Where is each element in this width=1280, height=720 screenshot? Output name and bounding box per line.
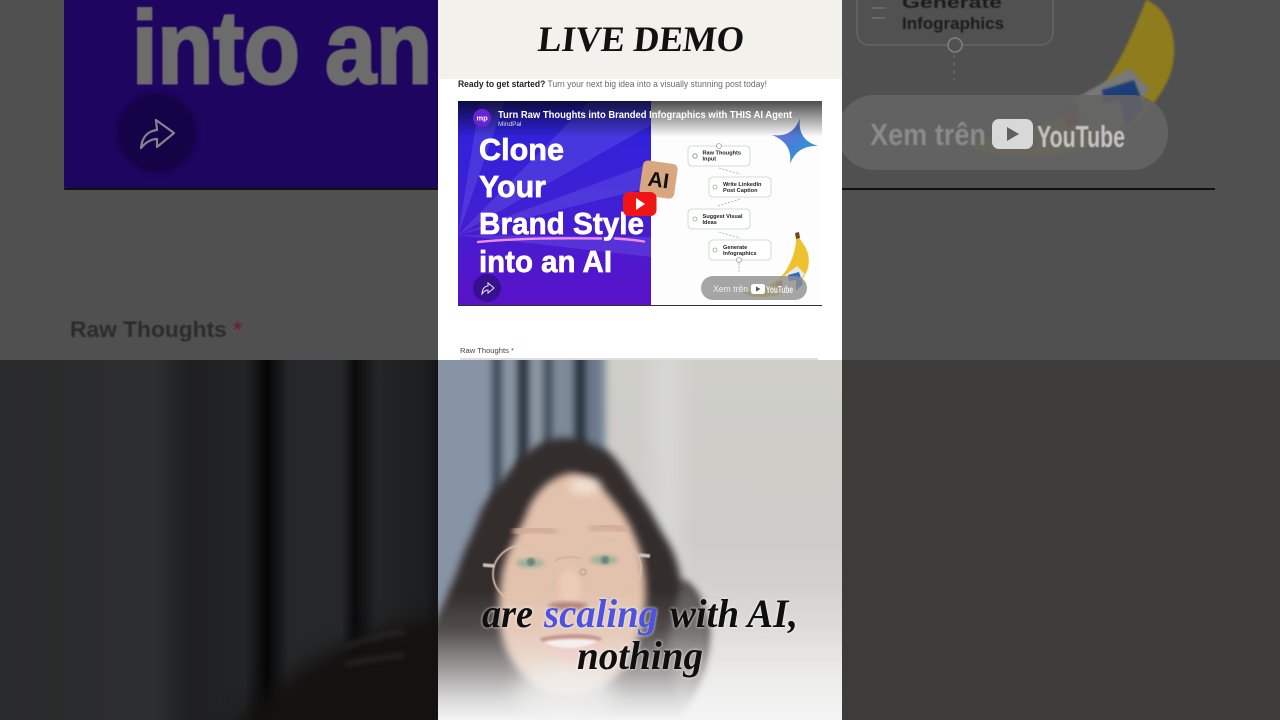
panel: blurred background right, bottom <box>842 360 1280 720</box>
icon: sparkle star <box>772 118 818 164</box>
icon: AI badge: AI <box>646 168 670 193</box>
mouth <box>540 634 603 661</box>
flow box: Raw Thoughts Input: Raw Thoughts <box>702 150 741 156</box>
caption: scaling <box>543 591 658 636</box>
intro text: Ready to get started? Turn your next big idea into a visually stunning post today! <box>458 79 767 89</box>
blurred form label: Raw Thoughts * <box>70 317 242 342</box>
flow box: Write LinkedIn Post Caption: Post Caption <box>723 188 758 194</box>
glasses <box>483 540 650 603</box>
flow box: Raw Thoughts Input <box>688 144 750 166</box>
curtain <box>438 360 611 624</box>
thumbnail heading <box>479 132 644 279</box>
chin wash and neck <box>512 665 618 710</box>
caption <box>482 591 798 678</box>
hair <box>430 438 708 720</box>
icon: AI badge <box>639 160 678 199</box>
eyebrows and eyes <box>514 526 626 568</box>
bottom fade <box>438 590 842 720</box>
nose <box>548 570 588 610</box>
form label: Raw Thoughts * <box>460 346 514 355</box>
flow box: Suggest Visual Ideas: Ideas <box>702 220 717 226</box>
flow box: Generate Infographics: Infographics <box>723 251 757 257</box>
thumbnail heading: into an AI <box>479 244 612 279</box>
title: LIVE DEMO <box>536 19 746 59</box>
blurred banana sticker <box>1080 67 1151 130</box>
blurred pill: watch on YouTube: YouTube <box>1037 119 1125 154</box>
icon: banana <box>743 232 809 297</box>
channel icon: mp <box>476 114 488 122</box>
flow box: Generate Infographics <box>709 240 771 262</box>
wall <box>600 360 842 712</box>
workflow diagram <box>688 144 771 272</box>
thumbnail heading: Clone <box>479 132 564 167</box>
flow box: Write LinkedIn Post Caption <box>709 177 771 197</box>
panel: blurred background left, top <box>0 0 464 360</box>
blurred pill: watch on YouTube <box>838 95 1168 170</box>
blurred workflow box: Infographics <box>902 14 1004 33</box>
watch on YouTube pill: Xem trên <box>713 284 748 295</box>
caption: are <box>482 591 533 636</box>
caption: with AI, <box>670 591 798 636</box>
thumbnail heading: Brand Style <box>479 206 644 241</box>
shoulder shadow <box>668 580 708 705</box>
flow box: Suggest Visual Ideas: Suggest Visual <box>702 214 743 220</box>
panel: screen recording <box>438 0 842 360</box>
pink underline <box>478 238 644 242</box>
video thumbnail <box>458 101 822 306</box>
watch on YouTube pill <box>701 276 807 300</box>
flow box: Raw Thoughts Input: Input <box>702 156 716 162</box>
blurred pill: watch on YouTube: Xem trên <box>870 117 986 152</box>
channel icon <box>473 109 491 127</box>
flow box: Write LinkedIn Post Caption: Write LinkedIn <box>723 182 762 188</box>
thumbnail light rays <box>458 101 651 257</box>
face <box>499 473 646 697</box>
icon: play button <box>623 192 656 216</box>
watch on YouTube pill: YouTube <box>766 285 793 296</box>
icon: share button <box>473 274 501 302</box>
video header gradient <box>458 101 822 137</box>
panel: blurred background right, top <box>820 0 1280 360</box>
thumbnail heading: Your <box>479 169 546 204</box>
channel name: MindPal <box>498 121 522 128</box>
icon: blurred share button <box>117 93 197 173</box>
title band <box>438 0 842 79</box>
panel: webcam presenter <box>420 345 842 720</box>
flow box: Generate Infographics: Generate <box>723 245 747 251</box>
caption: nothing <box>577 633 703 678</box>
blurred workflow box <box>857 0 1053 80</box>
panel: blurred background left, bottom <box>0 360 450 720</box>
video title: Turn Raw Thoughts into Branded Infographics with THIS AI Agent <box>498 109 792 121</box>
blurred banana <box>1104 0 1176 103</box>
flow box: Suggest Visual Ideas <box>688 209 750 229</box>
